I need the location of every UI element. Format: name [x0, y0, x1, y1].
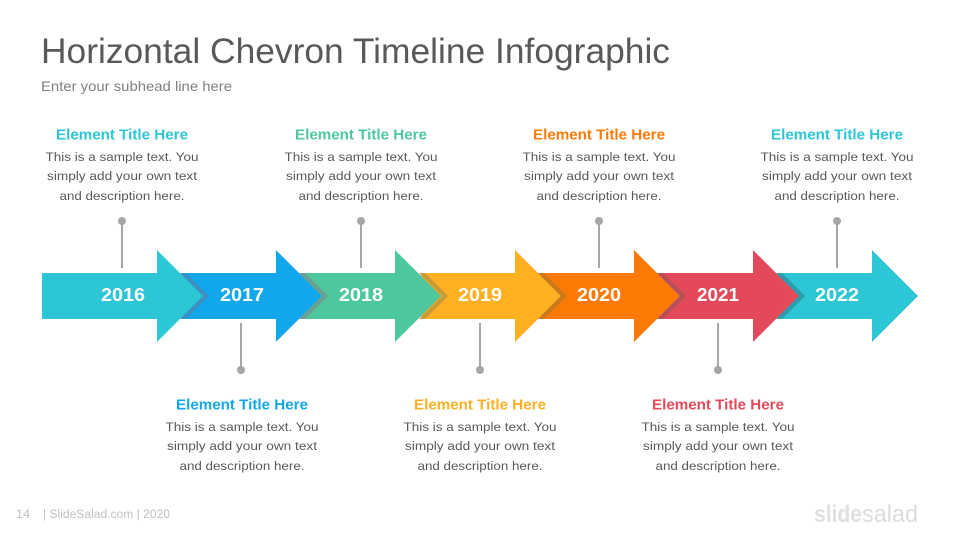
- text block 2018: [284, 126, 438, 203]
- text block 2022: This is a sample text. You: [760, 150, 914, 164]
- arrow 2017: 2017: [220, 284, 264, 305]
- text block 2017: simply add your own text: [167, 439, 318, 453]
- title: Horizontal Chevron Timeline Infographic: [41, 31, 670, 71]
- connector 2021: [714, 323, 722, 374]
- text block 2021: simply add your own text: [643, 439, 794, 453]
- text block 2021: [642, 396, 794, 473]
- text block 2018: Element Title Here: [295, 126, 427, 144]
- text block 2016: Element Title Here: [56, 126, 188, 144]
- text block 2018: simply add your own text: [286, 169, 437, 183]
- arrow 2022: [778, 250, 918, 342]
- arrow 2021: 2021: [697, 284, 739, 305]
- text block 2017: This is a sample text. You: [166, 420, 318, 434]
- arrow 2016: [42, 250, 209, 342]
- arrow 2020: 2020: [577, 284, 621, 305]
- text block 2018: This is a sample text. You: [284, 150, 438, 164]
- footer credit: | SlideSalad.com | 2020: [43, 509, 170, 521]
- arrow 2020: [540, 250, 686, 342]
- text block 2017: and description here.: [180, 459, 304, 473]
- footer logo: salad: [862, 501, 918, 528]
- text block 2020: [522, 126, 676, 203]
- text block 2016: and description here.: [60, 189, 184, 203]
- arrow 2019: 2019: [458, 284, 502, 305]
- text block 2021: and description here.: [656, 459, 780, 473]
- arrow 2018: 2018: [339, 284, 383, 305]
- subhead: Enter your subhead line here: [41, 78, 232, 94]
- text block 2019: [404, 396, 556, 473]
- footer logo: [814, 501, 918, 528]
- text block 2020: This is a sample text. You: [522, 150, 676, 164]
- text block 2021: This is a sample text. You: [642, 420, 794, 434]
- text block 2022: Element Title Here: [771, 126, 903, 144]
- chevron timeline: [42, 250, 918, 342]
- arrow 2022: 2022: [815, 284, 859, 305]
- text block 2018: and description here.: [298, 189, 424, 203]
- text block 2022: and description here.: [774, 189, 900, 203]
- text block 2020: simply add your own text: [524, 169, 675, 183]
- connector 2017: [237, 323, 245, 374]
- text block 2019: and description here.: [418, 459, 542, 473]
- text block 2019: simply add your own text: [405, 439, 556, 453]
- arrow 2021: [659, 250, 805, 342]
- connector 2022: [833, 217, 841, 268]
- connector 2020: [595, 217, 603, 268]
- text block 2020: Element Title Here: [533, 126, 665, 144]
- arrow 2016: 2016: [101, 284, 145, 305]
- connector 2016: [118, 217, 126, 268]
- text block 2016: [46, 126, 198, 203]
- arrow 2017: [181, 250, 328, 342]
- footer logo: slide: [814, 501, 862, 528]
- text block 2020: and description here.: [536, 189, 662, 203]
- text block 2022: [760, 126, 914, 203]
- arrow 2019: [421, 250, 567, 342]
- connector 2019: [476, 323, 484, 374]
- arrow 2018: [302, 250, 448, 342]
- text block 2016: This is a sample text. You: [46, 150, 198, 164]
- text block 2017: [166, 396, 318, 473]
- text block 2017: Element Title Here: [176, 396, 308, 414]
- footer page number: 14: [16, 507, 30, 521]
- text block 2016: simply add your own text: [47, 169, 198, 183]
- text block 2019: This is a sample text. You: [404, 420, 556, 434]
- text block 2021: Element Title Here: [652, 396, 784, 414]
- connector 2018: [357, 217, 365, 268]
- text block 2019: Element Title Here: [414, 396, 546, 414]
- text block 2022: simply add your own text: [762, 169, 913, 183]
